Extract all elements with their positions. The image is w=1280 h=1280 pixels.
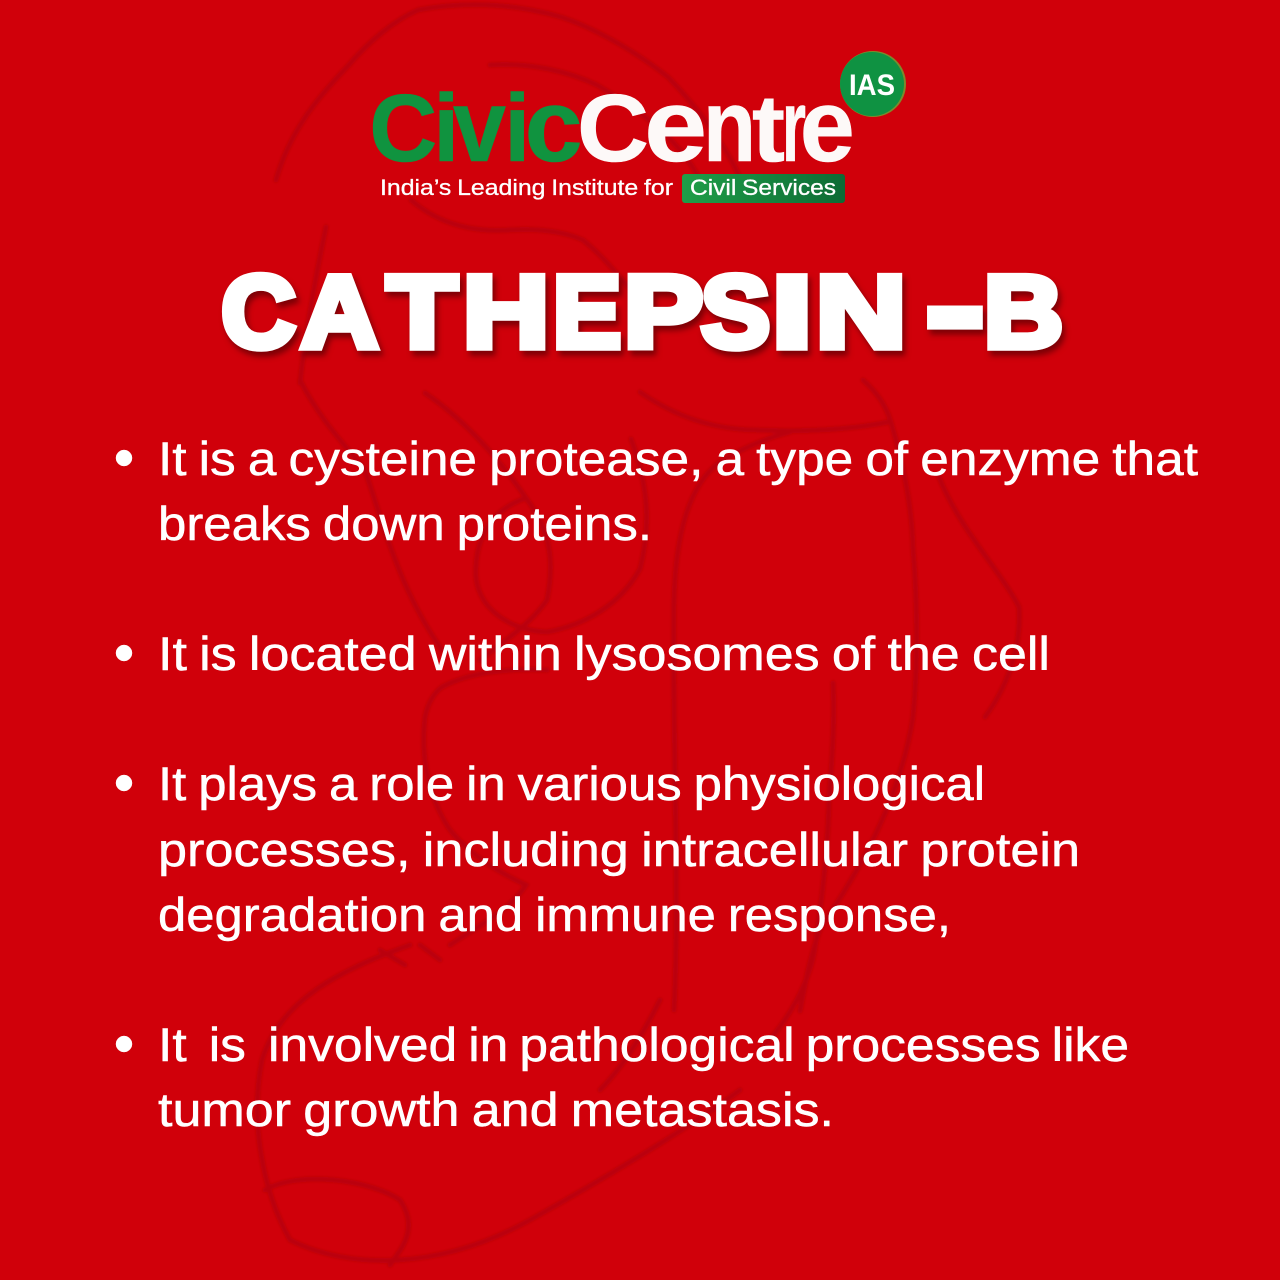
bullet 1: breaks down proteins.	[158, 497, 652, 550]
IAS badge: IAS	[849, 69, 895, 102]
logo wordmark: i	[504, 75, 530, 182]
logo tagline: India’s Leading Institute for	[380, 175, 673, 200]
title: -	[930, 252, 980, 366]
bullet 1: It is a cysteine protease, a type of enzyme that	[158, 432, 1198, 485]
background sketch illustration	[257, 5, 1019, 1265]
logo wordmark: r	[782, 68, 806, 183]
bullet 3: degradation and immune response,	[158, 888, 951, 941]
logo	[369, 51, 906, 203]
title: T	[387, 255, 457, 369]
bullet 2: It is located within lysosomes of the cell	[158, 627, 1050, 680]
title: C	[222, 255, 296, 369]
logo wordmark: v	[453, 68, 506, 183]
title: N	[816, 255, 906, 369]
bullet list	[116, 432, 1198, 1136]
IAS badge	[840, 51, 906, 117]
title: E	[553, 255, 621, 369]
bullet 3: processes, including intracellular protein	[158, 823, 1080, 876]
logo wordmark: e	[644, 68, 707, 183]
title: A	[301, 255, 378, 369]
civil services pill	[682, 174, 845, 203]
logo wordmark: t	[752, 75, 785, 182]
logo wordmark: C	[369, 75, 437, 182]
bullet 4	[116, 1018, 1129, 1136]
civil services pill: Civil Services	[690, 175, 836, 200]
bullet 3	[116, 757, 1080, 941]
bullet 3: It plays a role in various physiological	[158, 757, 985, 810]
bullet 4: It is involved in pathological processes like	[158, 1018, 1129, 1071]
bullet 4: tumor growth and metastasis.	[158, 1083, 834, 1136]
logo wordmark: n	[703, 68, 756, 183]
logo wordmark: i	[433, 75, 459, 182]
title: I	[772, 255, 812, 369]
logo wordmark: c	[525, 68, 583, 183]
bullet 1	[116, 432, 1198, 550]
logo wordmark	[369, 68, 855, 183]
logo wordmark: e	[800, 68, 855, 183]
title: S	[701, 255, 770, 369]
logo wordmark: C	[577, 75, 649, 182]
title: B	[984, 255, 1063, 369]
title: H	[463, 255, 549, 369]
title: P	[624, 255, 703, 369]
